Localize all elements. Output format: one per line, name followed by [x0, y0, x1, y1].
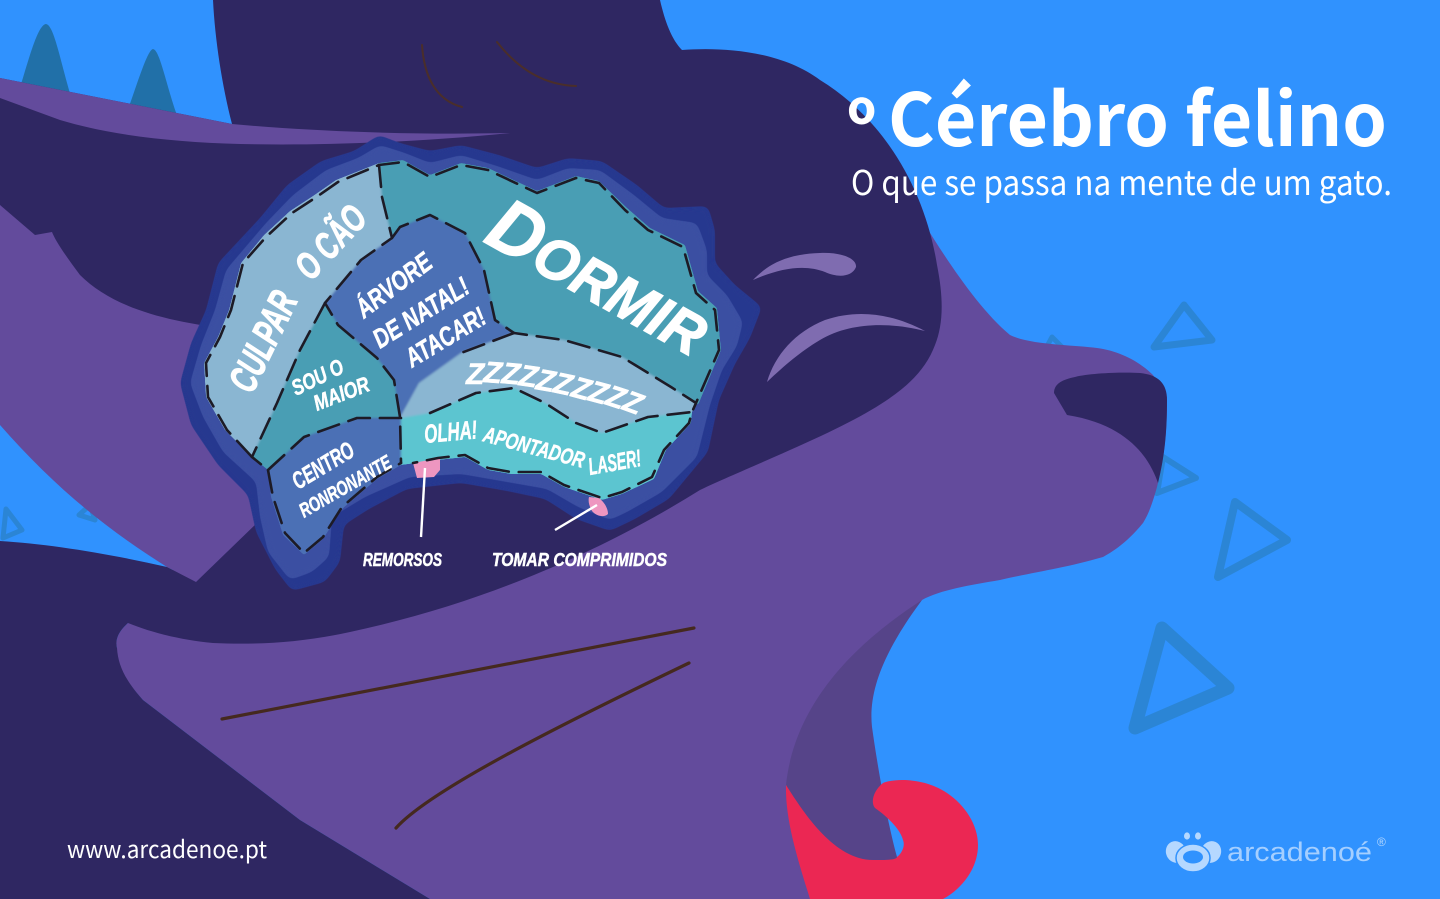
head crease lines [422, 42, 576, 107]
leader line: remorsos [421, 468, 425, 537]
label: apontador: APONTADOR [480, 421, 588, 473]
brain lobes [204, 160, 721, 555]
lobe: árvore de natal [325, 215, 514, 417]
cat head dark silhouette [0, 0, 942, 899]
lobe: remorsos [413, 458, 440, 478]
nose [1054, 373, 1167, 483]
label: centro: CENTRO [287, 437, 360, 495]
subtitle: O que se passa na mente de um gato. [851, 156, 1392, 205]
cat neck and snout [116, 225, 1167, 899]
lobe: laser [401, 388, 692, 500]
dashed lobe borders [206, 162, 719, 553]
lobe: centro ronronante [268, 418, 401, 555]
closed eye lower [767, 314, 925, 382]
label: ronronante: RONRONANTE [296, 452, 396, 522]
decorative faint triangles [3, 305, 1287, 728]
registered mark: ® [1377, 835, 1386, 849]
title ordinal: º [847, 74, 876, 175]
label: zzz: ZZZZZZZZZZ [465, 356, 649, 422]
whiskers [222, 628, 694, 828]
tongue [786, 780, 978, 899]
website: www.arcadenoe.pt [67, 830, 267, 865]
icon: dog face [1162, 832, 1225, 872]
lobe: zzz [400, 333, 696, 433]
ear spikes [20, 24, 178, 118]
label: de natal: DE NATAL! [367, 271, 475, 354]
label: olha: OLHA! [423, 414, 479, 449]
back purple band [0, 78, 510, 145]
label: sou o: SOU O [287, 354, 348, 400]
label: culpar: CULPAR [221, 284, 307, 399]
leader line: tomar comprimidos [555, 505, 597, 530]
closed eye upper [753, 253, 856, 280]
mouth interior [786, 600, 922, 875]
label: maior: MAIOR [310, 372, 373, 416]
label: dormir: DORMIR [474, 182, 725, 372]
label: árvore: ÁRVORE [348, 246, 438, 324]
brain [180, 135, 762, 591]
label: atacar: ATACAR! [399, 302, 491, 374]
lobe: sou o maior [252, 303, 400, 470]
lobe: culpar o cão [204, 163, 392, 457]
label: o cão: O CÃO [285, 196, 376, 288]
left cat shoulder [0, 205, 300, 582]
label: remorsos: REMORSOS [363, 550, 442, 570]
logo wordmark: arcadenoé [1227, 837, 1372, 867]
title [847, 62, 1387, 175]
title words: Cérebro felino [888, 62, 1387, 168]
brain inner contour [190, 145, 743, 580]
label: tomar comprimidos: TOMAR COMPRIMIDOS [492, 550, 667, 570]
lobe: dormir [379, 160, 721, 405]
label: laser: LASER! [586, 445, 643, 481]
logo: arcadenoé [1162, 832, 1386, 872]
lobe: tomar comprimidos [589, 497, 608, 516]
brain outer contour [180, 135, 762, 591]
